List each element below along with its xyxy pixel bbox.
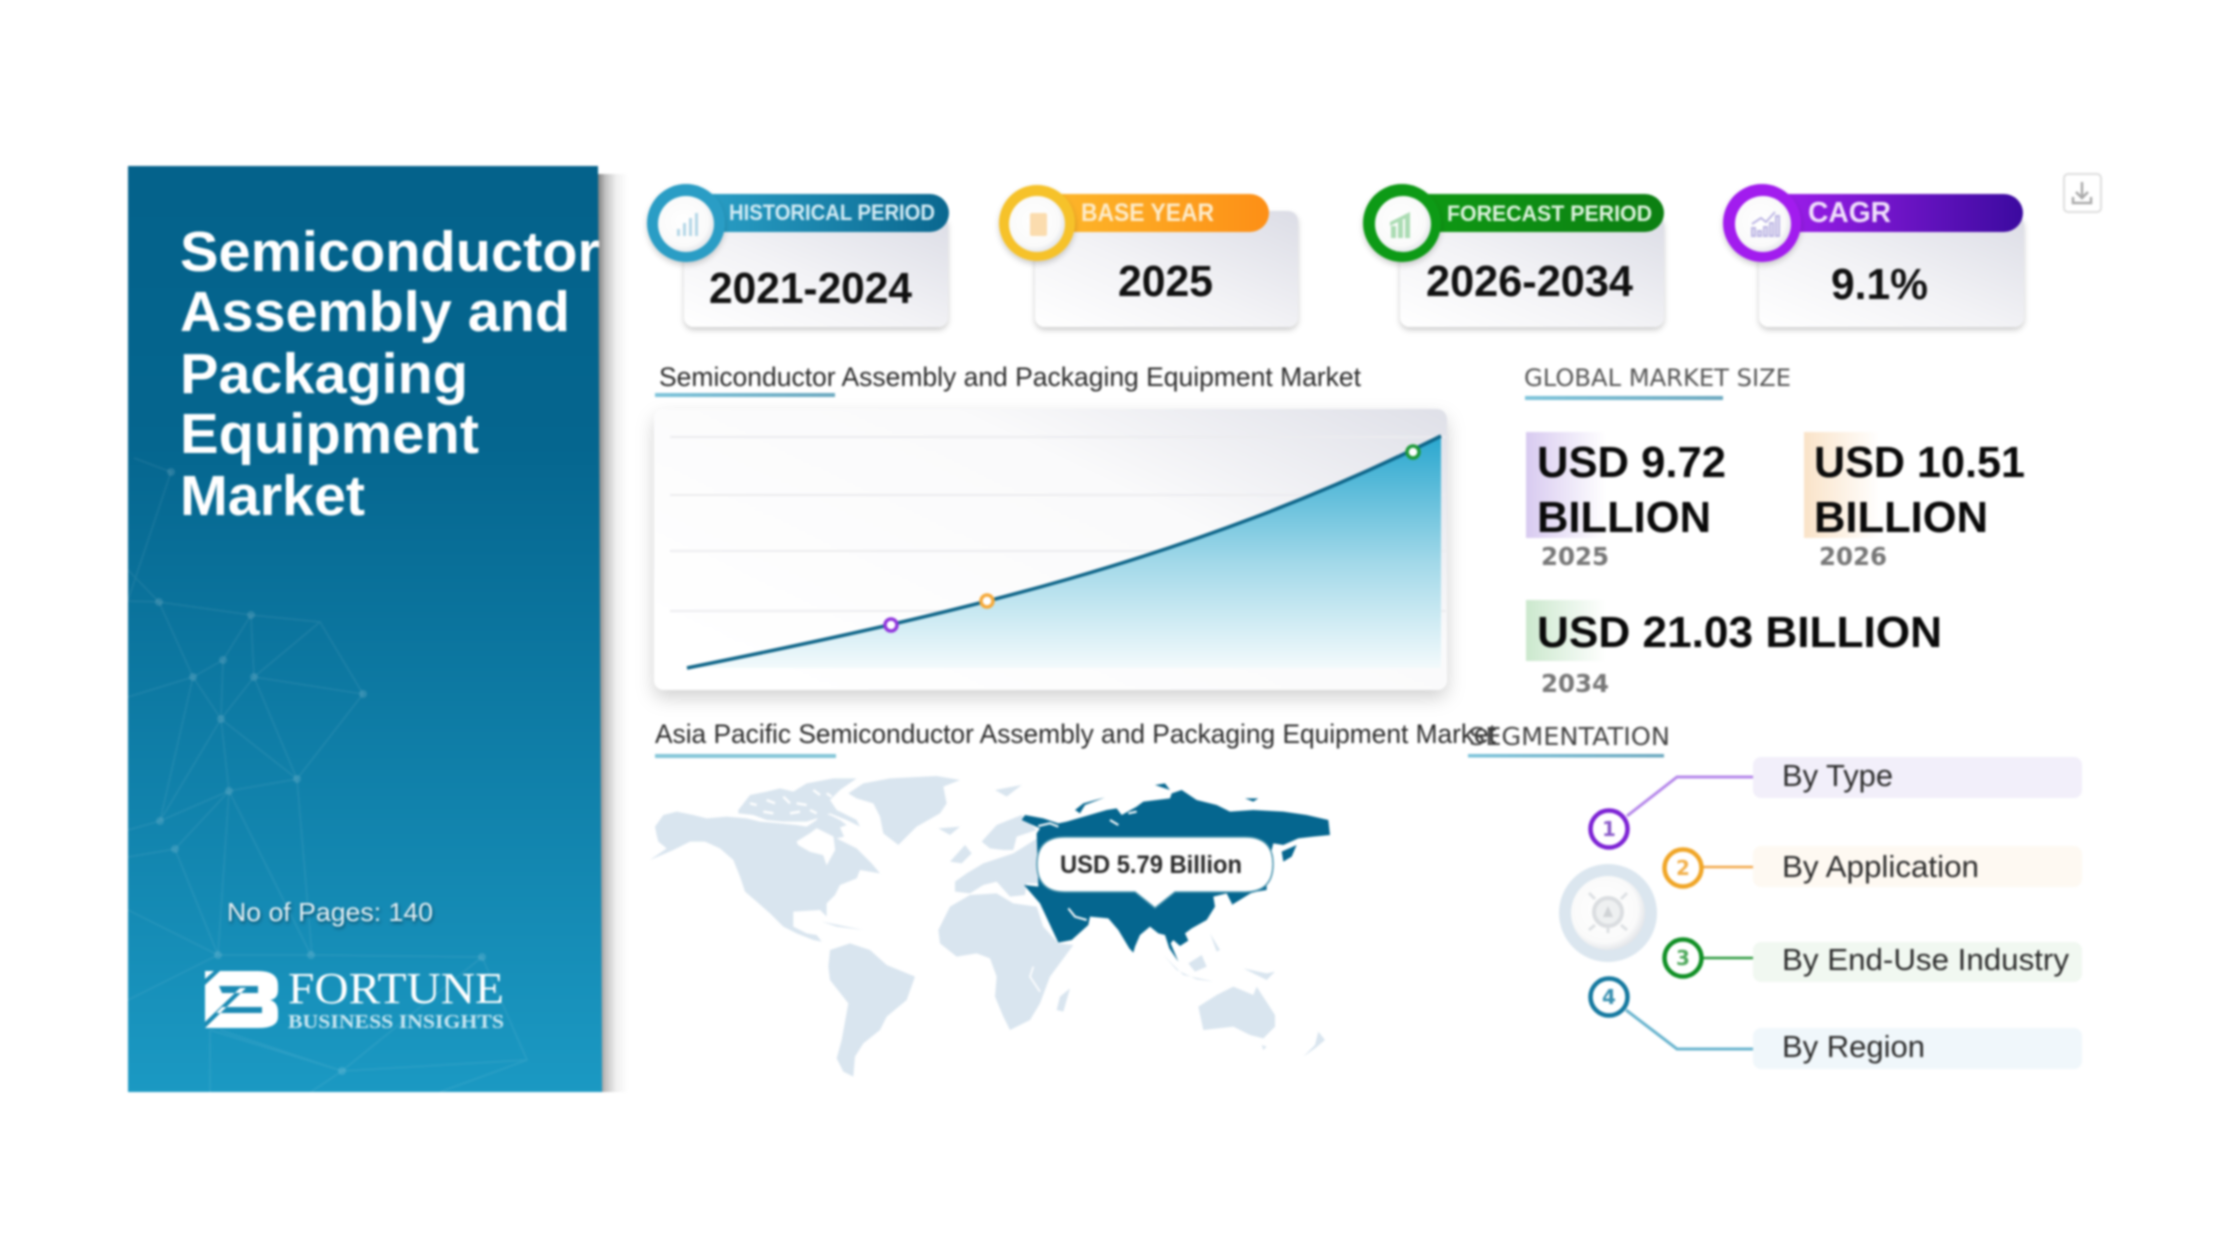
logo tagline: BUSINESS INSIGHTS: [288, 1011, 504, 1033]
connector 4: [1626, 1010, 1753, 1049]
pill header: [1765, 194, 2023, 232]
heading: global market size: GLOBAL MARKET SIZE: [1524, 364, 1791, 392]
icon badge: [647, 184, 725, 262]
badge 3: 3: [1676, 946, 1690, 970]
segment: by application: [1753, 846, 2082, 887]
title: Semiconductor: [180, 220, 600, 284]
title: [180, 220, 600, 528]
badge 1: 1: [1602, 817, 1616, 841]
page count: No of Pages: 140: [227, 897, 433, 927]
logo wordmark: FORTUNE: [288, 964, 504, 1013]
connector 3: [1703, 957, 1755, 959]
badge 1: [1590, 810, 1628, 848]
label: FORECAST PERIOD: [1447, 201, 1652, 226]
segment: by type: By Type: [1782, 758, 1893, 793]
panel shadow: [598, 174, 628, 1092]
metric: 2026 size: [1804, 432, 2025, 571]
value: 9.1%: [1831, 260, 1928, 309]
label: BASE YEAR: [1081, 199, 1214, 227]
pill header: [690, 194, 949, 232]
pill header: [1405, 194, 1664, 232]
metric: 2026 size: USD 10.51: [1814, 438, 2025, 487]
connector 1: [1627, 777, 1753, 816]
marker: 2026: [981, 595, 993, 607]
title: Equipment: [180, 402, 479, 466]
metric: 2034 size: [1526, 600, 1942, 698]
label: CAGR: [1808, 197, 1891, 229]
logo: [205, 964, 504, 1033]
center hub icon: [1559, 864, 1657, 962]
panel: title sidebar: [128, 166, 602, 1092]
value: 2021-2024: [709, 264, 913, 313]
pill header: [1040, 194, 1269, 232]
value: 2025: [1118, 257, 1213, 306]
map: world: [650, 776, 1073, 1077]
stat card: historical period: [647, 184, 949, 327]
segment: by end-use industry: By End-Use Industry: [1782, 942, 2069, 977]
continents: [650, 776, 1073, 1077]
diagram: segmentation: [1559, 757, 2082, 1069]
stat card: forecast period: [1363, 184, 1664, 327]
stat card: base year: [999, 185, 1298, 327]
badge 3: [1664, 940, 1702, 976]
stat card: CAGR: [1723, 184, 2024, 327]
icon: download: [2064, 174, 2101, 212]
region: asia highlighted: [1022, 790, 1330, 962]
area fill: [687, 436, 1441, 668]
metric: 2025 size: [1526, 432, 1726, 571]
logo mark: [205, 971, 278, 1028]
metric: 2034 size: USD 21.03 BILLION: [1537, 608, 1942, 657]
heading: segmentation: SEGMENTATION: [1469, 722, 1670, 751]
heading: market chart: Semiconductor Assembly and Packaging Equipment Market: [659, 362, 1361, 392]
badge 4: 4: [1602, 985, 1616, 1009]
badge 4: [1590, 978, 1628, 1016]
title: Packaging: [180, 342, 468, 406]
metric: 2025 size: BILLION: [1537, 493, 1711, 542]
metric: 2025 size: 2025: [1541, 542, 1609, 571]
map: asia pacific region: [1022, 783, 1330, 1057]
chart: market growth curve: [654, 409, 1447, 690]
marker: 2034: [1407, 446, 1419, 458]
arctic and lake cut-outs: [750, 790, 1040, 992]
inland water cut-outs: [1038, 812, 1137, 920]
value: 2026-2034: [1426, 257, 1634, 306]
title: Assembly and: [180, 280, 570, 344]
segment: by type: [1753, 757, 2082, 798]
callout: asia pacific value: USD 5.79 Billion: [1060, 851, 1242, 879]
metric: 2034 size: 2034: [1541, 669, 1609, 698]
callout: asia pacific value: [1037, 837, 1273, 908]
segment: by application: By Application: [1782, 849, 1979, 884]
network background pattern: [128, 458, 527, 1092]
metric: 2025 size: USD 9.72: [1537, 438, 1726, 487]
segment: by region: [1753, 1028, 2082, 1069]
icon badge: [1723, 184, 1801, 262]
metric: 2026 size: BILLION: [1814, 493, 1988, 542]
title: Market: [180, 464, 365, 528]
icon badge: [999, 185, 1075, 261]
label: HISTORICAL PERIOD: [729, 200, 935, 225]
marker: 2025: [885, 619, 897, 631]
badge 2: [1664, 850, 1702, 886]
australasia and south-east asia: [1163, 933, 1325, 1057]
metric: 2026 size: 2026: [1819, 542, 1887, 571]
icon badge: [1363, 184, 1441, 262]
connector 2: [1703, 866, 1755, 868]
islands: [1075, 783, 1297, 905]
segment: by region: By Region: [1782, 1029, 1925, 1064]
curve line: [687, 436, 1441, 668]
heading: asia pacific: Asia Pacific Semiconductor Assembly and Packaging Equipment Market: [655, 719, 1496, 749]
badge 2: 2: [1676, 856, 1690, 880]
